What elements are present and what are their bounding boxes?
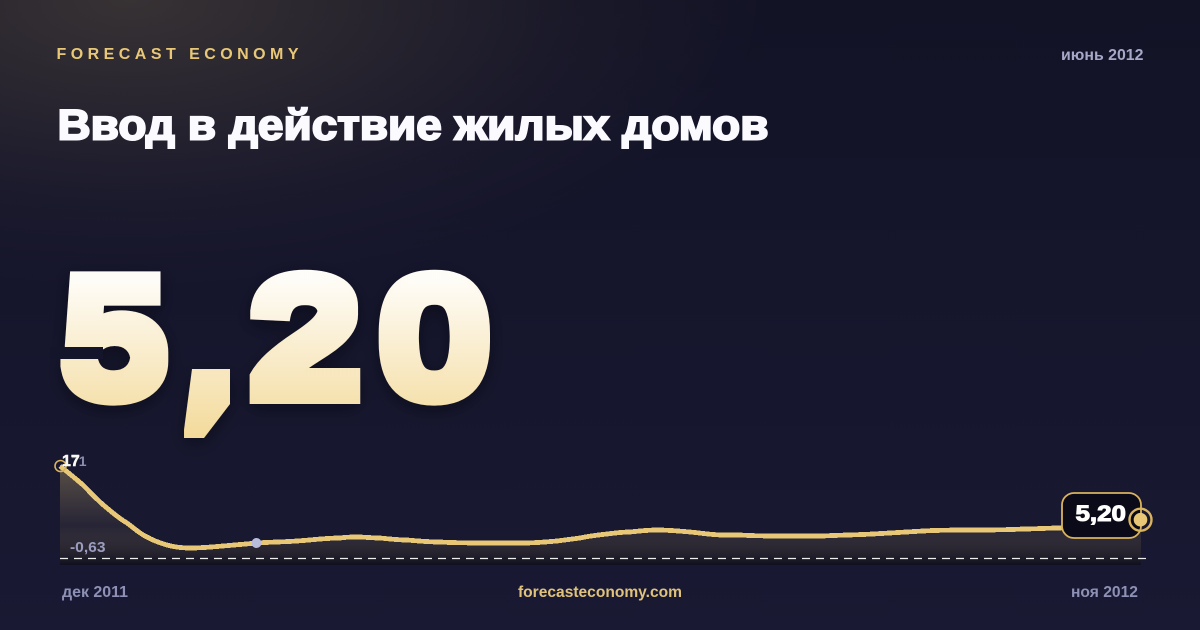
start marker <box>55 460 66 472</box>
current marker <box>1130 509 1152 531</box>
date label: июнь 2012 <box>1061 47 1144 64</box>
current value badge: 5,20 <box>1076 501 1126 526</box>
title: Ввод в действие жилых домов <box>58 102 768 150</box>
max label secondary: 71 <box>71 453 87 469</box>
big value: 5 <box>60 244 168 432</box>
baseline <box>60 558 1146 560</box>
source url: forecasteconomy.com <box>518 584 682 601</box>
start date: дек 2011 <box>62 584 128 601</box>
line chart <box>55 453 1152 565</box>
end date: ноя 2012 <box>1071 584 1138 601</box>
max value label: 17 <box>62 453 80 470</box>
comma <box>184 373 230 434</box>
big value: 0 <box>376 244 493 432</box>
big value: 2 <box>248 244 363 432</box>
min value label: -0,63 <box>70 540 106 556</box>
min marker <box>252 538 262 548</box>
chart line <box>60 466 1141 548</box>
brand label: FORECAST ECONOMY <box>56 46 299 63</box>
current value badge <box>1062 493 1141 538</box>
big value <box>60 244 493 434</box>
chart area fill <box>60 466 1141 565</box>
